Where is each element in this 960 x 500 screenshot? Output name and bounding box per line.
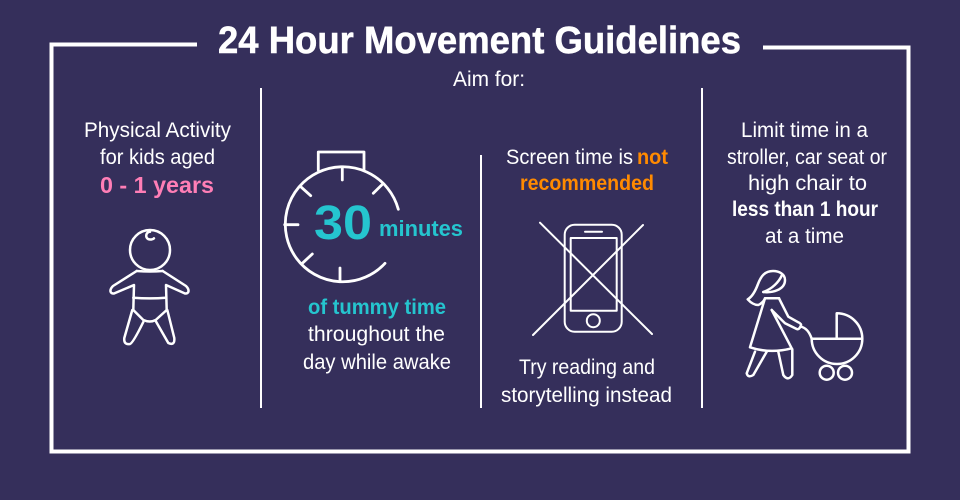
subtitle: aim for: Aim for: bbox=[453, 68, 525, 91]
title: 24 Hour Movement Guidelines bbox=[218, 20, 741, 62]
panel: limit sitting time bbox=[727, 119, 887, 380]
limit time text: stroller, car seat or bbox=[727, 146, 887, 169]
tummy time text: throughout the bbox=[308, 323, 445, 346]
30 minutes: 30 bbox=[314, 197, 372, 250]
physical activity text: for kids aged bbox=[100, 146, 215, 169]
screen time text: Screen time is bbox=[506, 146, 633, 169]
30 minutes: minutes bbox=[379, 216, 463, 241]
physical activity text: 0 - 1 years bbox=[100, 172, 214, 198]
screen time text bbox=[506, 146, 668, 195]
reading suggestion: storytelling instead bbox=[501, 384, 672, 407]
30 minutes bbox=[314, 197, 463, 250]
limit time text: Limit time in a bbox=[741, 119, 868, 142]
tummy time text: day while awake bbox=[303, 351, 451, 374]
limit time text: at a time bbox=[765, 225, 844, 248]
icon: parent with stroller bbox=[747, 271, 862, 380]
panel: physical activity bbox=[84, 119, 231, 344]
icon: stopwatch bbox=[285, 152, 398, 282]
icon: baby bbox=[110, 230, 189, 344]
physical activity text bbox=[84, 119, 231, 198]
screen time text: not bbox=[637, 146, 668, 169]
limit time text: high chair to bbox=[748, 172, 867, 195]
tummy time text: of tummy time bbox=[308, 296, 446, 319]
screen time text: recommended bbox=[520, 172, 654, 195]
physical activity text: Physical Activity bbox=[84, 119, 231, 142]
icon: crossed-out phone bbox=[533, 223, 652, 335]
panel: tummy time bbox=[285, 152, 463, 374]
reading suggestion: Try reading and bbox=[519, 356, 655, 379]
reading suggestion bbox=[501, 356, 672, 407]
limit time text: less than 1 hour bbox=[732, 198, 878, 221]
limit time text bbox=[727, 119, 887, 248]
tummy time text bbox=[303, 296, 451, 374]
panel: screen time bbox=[501, 146, 672, 407]
